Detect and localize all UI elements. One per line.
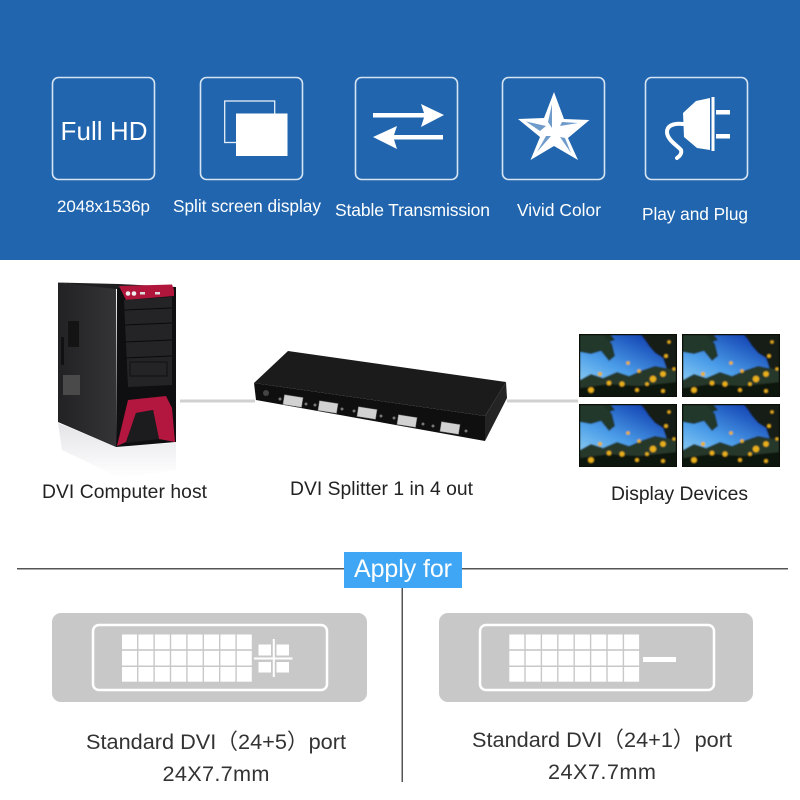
caption: Play and Plug: Play and Plug — [642, 204, 748, 224]
connection line: splitter to displays — [507, 400, 578, 402]
screen top right — [682, 334, 780, 397]
screen top left — [579, 334, 677, 397]
label: Display Devices: Display Devices — [611, 484, 748, 505]
port screws — [278, 398, 468, 432]
panel: DVI 24+1 connector — [439, 613, 753, 702]
text: 24+1 port specification: Standard DVI（24+1）port — [472, 727, 732, 752]
pin cross +5 — [254, 639, 292, 677]
illustration: four display screens — [579, 334, 780, 467]
heading: Apply for: Apply for — [354, 555, 452, 583]
pin grid 24 — [509, 634, 639, 682]
label: DVI Computer host: DVI Computer host — [42, 482, 208, 503]
icon: overlapping windows — [200, 78, 302, 180]
text: 24+1 port specification: 24X7.7mm — [548, 759, 656, 784]
feature: Full HD — [52, 78, 154, 216]
feature: play and plug — [642, 78, 748, 224]
divider lines — [17, 568, 788, 782]
DVI output ports — [283, 395, 460, 434]
text: 24+5 port specification — [86, 729, 346, 786]
illustration: DVI splitter box — [254, 351, 507, 441]
text: 24+5 port specification: 24X7.7mm — [162, 761, 270, 786]
heading: Apply for — [344, 552, 462, 588]
label: DVI Splitter 1 in 4 out: DVI Splitter 1 in 4 out — [290, 479, 474, 500]
icon: Full HD box: Full HD — [60, 116, 148, 146]
icon: faceted star — [502, 78, 604, 180]
feature: stable transmission — [335, 78, 490, 220]
header band — [0, 0, 800, 260]
caption: Split screen display: Split screen display — [173, 196, 321, 216]
screen bottom left — [579, 404, 677, 467]
caption: Stable Transmission: Stable Transmission — [335, 200, 490, 220]
screen bottom right — [682, 404, 780, 467]
pin grid 24 — [122, 634, 252, 682]
pin blade +1 — [643, 657, 676, 662]
feature: vivid color — [502, 78, 604, 220]
caption: 2048x1536p: 2048x1536p — [57, 197, 150, 216]
text: 24+1 port specification — [472, 727, 732, 784]
connection line: computer to splitter — [180, 400, 255, 402]
icon: two opposing arrows — [356, 78, 458, 180]
illustration: computer tower — [58, 282, 176, 478]
caption: Vivid Color: Vivid Color — [517, 200, 601, 220]
feature: split screen — [173, 78, 321, 216]
icon: power plug — [646, 78, 748, 180]
panel: DVI 24+5 connector — [52, 613, 367, 702]
text: 24+5 port specification: Standard DVI（24+5）port — [86, 729, 346, 754]
